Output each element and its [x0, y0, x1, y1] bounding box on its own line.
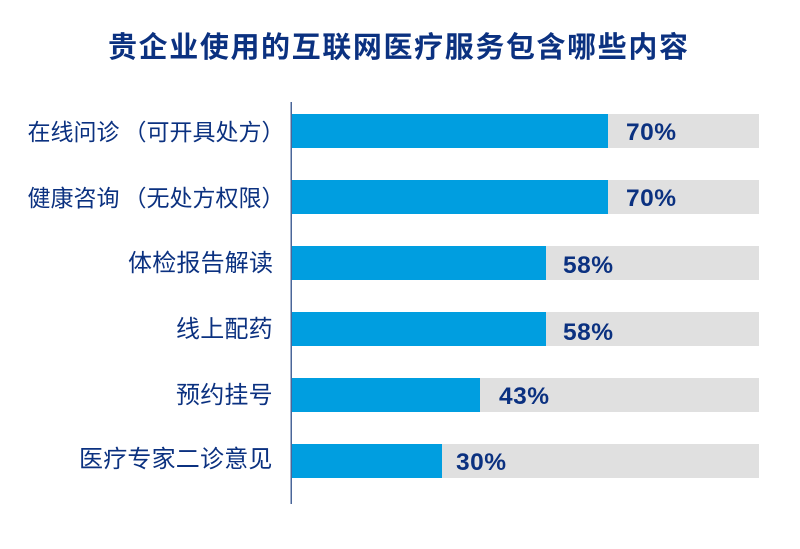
row: 线上配药 58%: 58%	[563, 319, 613, 346]
row: 健康咨询 70%: 70%	[626, 185, 676, 212]
title: 贵企业使用的互联网医疗服务包含哪些内容	[108, 31, 688, 64]
row: 医疗专家二诊意见 30%	[79, 444, 759, 478]
row: 在线问诊 70%	[28, 114, 759, 148]
row: 健康咨询 70%: （无处方权限）	[124, 185, 284, 211]
row: 线上配药 58%: 线上配药	[176, 316, 273, 343]
row: 预约挂号 43%: 预约挂号	[176, 382, 273, 409]
row: 体检报告解读 58%: 58%	[563, 252, 613, 279]
vertical axis	[290, 102, 292, 504]
row: 在线问诊 70%: 70%	[626, 119, 676, 146]
row: 体检报告解读 58%: 体检报告解读	[128, 250, 273, 277]
row: 在线问诊 70%: （可开具处方）	[124, 119, 284, 145]
row: 预约挂号 43%	[176, 378, 759, 412]
bar chart	[28, 102, 759, 504]
row: 医疗专家二诊意见 30%: 医疗专家二诊意见	[79, 446, 273, 473]
row: 预约挂号 43%: 43%	[499, 383, 549, 410]
row: 健康咨询 70%	[28, 180, 759, 214]
row: 医疗专家二诊意见 30%: 30%	[456, 449, 506, 476]
row: 健康咨询 70%: 健康咨询	[28, 185, 120, 211]
row: 体检报告解读 58%	[128, 246, 759, 280]
row: 在线问诊 70%: 在线问诊	[28, 119, 120, 145]
row: 线上配药 58%	[176, 312, 759, 346]
